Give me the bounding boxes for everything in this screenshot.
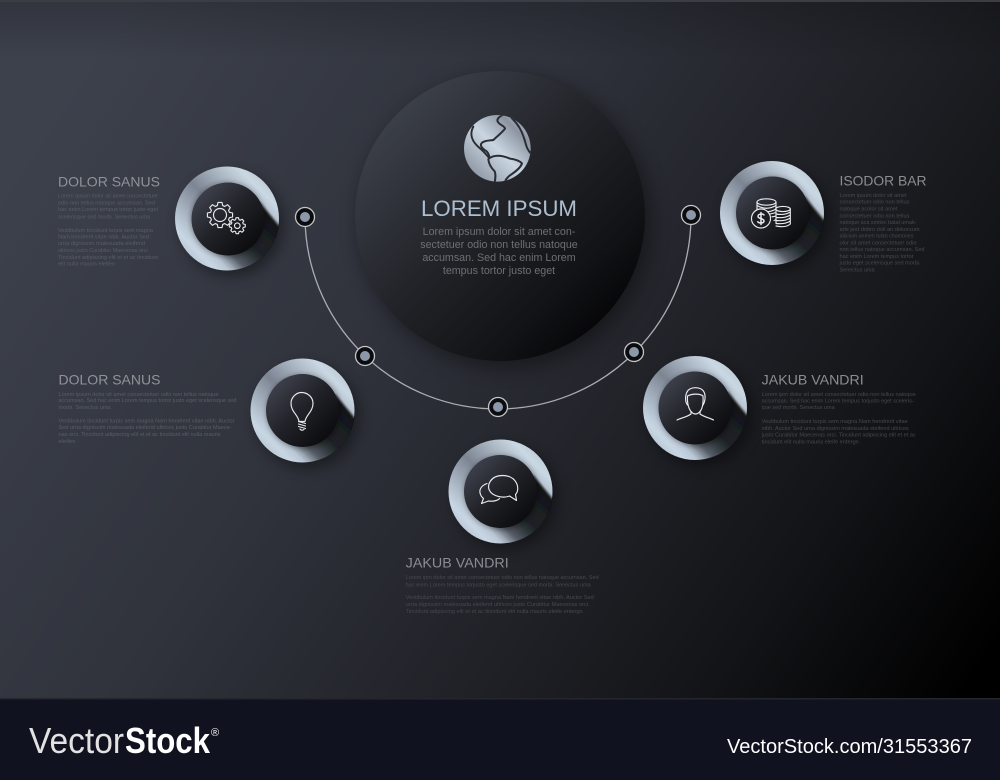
body text: Lorem ipsum dolor sit amet consectetuer <box>58 194 158 200</box>
body text <box>58 392 237 445</box>
body text: Vestibulum tincidunt turpis sem magna Nam hendrerit vitae nibh. Auctor <box>58 418 235 424</box>
body text: eleifen <box>58 439 76 445</box>
body text: Lorem ipm dolor sit amet consectetuer odio non tellus natoque <box>762 392 916 398</box>
body text: hac enim Lorem tempus torjusto eget scelerisque sed morbi. Senectus uma <box>406 582 591 588</box>
body text: odio non tellus natoque accumsan. Sed <box>58 200 155 206</box>
footer logo: Vector <box>29 720 124 761</box>
ring badge: person <box>643 356 752 466</box>
body text: ultrices justo Curabitur Maecenas orci. <box>58 248 149 254</box>
timeline node 1 <box>296 208 314 226</box>
body text: Tincidunt adipiscing elit et et ac tincidunt <box>58 255 159 261</box>
body text: olor sit amet consectetuer odio <box>840 240 917 246</box>
text block: dolor sanus top <box>58 174 160 268</box>
body text <box>761 392 916 446</box>
connecting arc <box>305 215 691 409</box>
timeline node 4 <box>624 342 644 362</box>
footer logo: Stock <box>125 720 211 761</box>
timeline node 3 <box>488 398 508 416</box>
body text: Sed urna dignissim malesuada eleifend ultrices justo Curabitur Maece- <box>58 425 232 431</box>
body text: hac enim Lorem tempus tortor justo eget <box>58 207 159 213</box>
ring badge: coins <box>720 161 829 271</box>
body text: Senectus uma <box>840 267 875 273</box>
body text: Vestibulum tincidunt turpis sem magna Nam hendrerit vitae nibh. Auctor Sed <box>406 595 594 601</box>
body text: urna dignissim malesuada eleifend <box>58 241 145 247</box>
icon: person <box>677 388 714 420</box>
body text: justo Curabitur Maecenas orci. Tincidunt adipiscing elit et et ac <box>761 432 916 438</box>
text block: jakub vandri right <box>761 372 916 446</box>
heading: ISODOR BAR <box>840 172 926 188</box>
body text: morbi. Senectus uma <box>58 405 111 411</box>
main text <box>420 226 578 277</box>
body text: Vestibulum tincidunt turpis sem magna Nam hendrerit vitae <box>762 419 908 425</box>
timeline node 2 <box>356 346 374 366</box>
central circle panel <box>355 71 651 368</box>
body text: urna dignissim malesuada eleifend ultrices justo Curabitur Maecenas orci. <box>406 602 590 608</box>
body text: hac enim Lorem tempus tortor <box>840 254 914 260</box>
text block: dolor sanus lower <box>58 371 237 445</box>
footer logo: ® <box>211 727 219 739</box>
body text: scelerisque sed morbi. Senectus uma <box>58 214 150 220</box>
body text: accumsan. Sed hac enim Lorem tempus torjusto eget sceleris- <box>762 398 914 404</box>
main text: Lorem ipsum dolor sit amet con- <box>423 226 576 238</box>
icon: globe <box>464 115 531 183</box>
text block: isodor bar <box>838 172 926 273</box>
icon: gears <box>207 202 245 234</box>
body text: nibh. Auctor Sed urna dignissim malesuada eleifend ultrices <box>762 426 909 432</box>
ring badge: chat <box>448 440 558 550</box>
heading: JAKUB VANDRI <box>762 372 864 388</box>
heading: DOLOR SANUS <box>58 174 160 190</box>
body text: Lorem ipm dolor sit amet consectetuer odio non tellus natoque accumsan. Sed <box>406 575 599 581</box>
body text: accumsan. Sed hac enim Lorem tempus tortor justo eget scelerisque sed <box>58 398 237 404</box>
body text: elit nulla mauris eleifen <box>58 262 115 268</box>
body text: natoque aca smitec batal umak- <box>840 220 917 226</box>
ring badge: gears <box>175 166 284 276</box>
body text: Vestibulum tincidunt turpis sem magna <box>58 228 153 234</box>
body text: que sed morbi. Senectus uma <box>762 405 835 411</box>
body text: justo eget scelerisque sed morbi. <box>838 261 920 267</box>
body text: non tellus natoque accumsan. Sed <box>840 247 925 253</box>
text block: jakub vandri centre <box>406 554 599 615</box>
icon: chat bubbles <box>480 476 518 504</box>
body text: nas orci. Tincidunt adipiscing elit et et ac tincidunt elit nulla mauris <box>58 432 221 438</box>
body text: tincidunt elit nulla mauris eleife entergn <box>762 440 859 446</box>
body text: Tincidunt adipiscing elit et et ac tincidunt elit nulla mauris eleife entergn <box>406 609 583 615</box>
body text: Lorem ipsum dolor sit amet consectetuer odio non tellus natoque <box>58 392 219 398</box>
footer bar <box>0 698 1000 780</box>
footer image id: VectorStock.com/31553367 <box>727 736 972 758</box>
body text: Lorem ipsum dolor sit amet <box>840 193 907 199</box>
icon: light bulb <box>291 392 313 430</box>
body text: natoque acolor sit amet <box>840 206 898 212</box>
ring badge: light bulb <box>250 358 360 468</box>
body text <box>406 575 599 615</box>
timeline node 5 <box>682 206 700 224</box>
body text: consectetuer odio non tellus <box>840 200 910 206</box>
body text <box>58 194 159 268</box>
body text <box>838 193 925 273</box>
heading: DOLOR SANUS <box>58 371 160 387</box>
body text: aliicium anmen tulan chamones <box>840 234 914 240</box>
body text: Nam hendrerit vitae nibh. Auctor Sed <box>58 234 149 240</box>
main text: tempus tortor justo eget <box>443 265 555 277</box>
main heading: LOREM IPSUM <box>421 196 577 221</box>
heading: JAKUB VANDRI <box>406 554 509 570</box>
footer logo <box>29 720 219 761</box>
icon: coins <box>752 199 790 228</box>
main text: sectetuer odio non tellus natoque <box>420 239 578 251</box>
body text: arle jest dobro doli an dekorsum <box>840 227 920 233</box>
body text: consectetuer odio non tellus <box>840 213 910 219</box>
main text: accumsan. Sed hac enim Lorem <box>422 252 576 264</box>
